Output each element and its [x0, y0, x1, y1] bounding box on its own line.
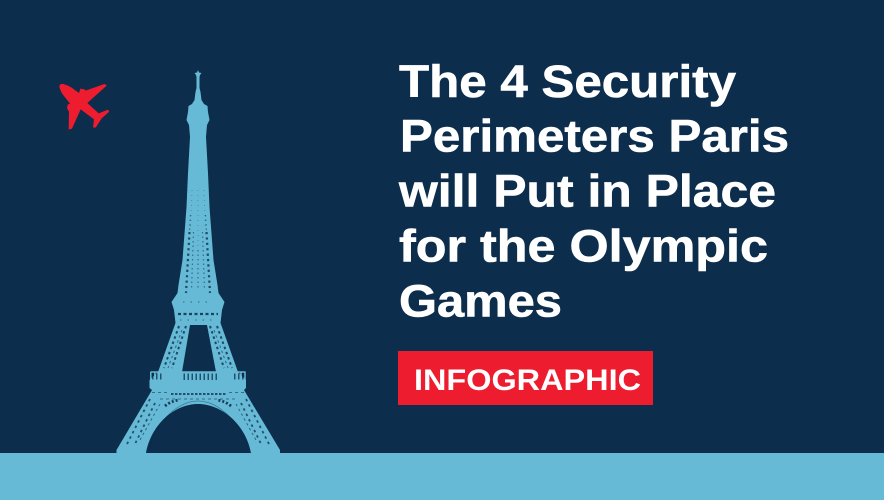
- title: for the Olympic: [399, 220, 768, 272]
- title: Games: [399, 276, 562, 326]
- opening between the legs: [182, 325, 216, 372]
- badge: infographic: [398, 351, 653, 405]
- title: will Put in Place: [398, 166, 776, 216]
- illustration: Eiffel Tower: [116, 70, 280, 453]
- title: The 4 Security: [399, 56, 736, 107]
- title: Perimeters Paris: [400, 110, 789, 162]
- tower silhouette: [116, 70, 280, 453]
- title: [398, 56, 789, 326]
- badge: infographic: INFOGRAPHIC: [414, 364, 641, 397]
- icon: red airplane: [59, 84, 109, 130]
- ground band: [0, 453, 884, 500]
- lattice work: [126, 190, 270, 450]
- first platform railing: [150, 372, 246, 380]
